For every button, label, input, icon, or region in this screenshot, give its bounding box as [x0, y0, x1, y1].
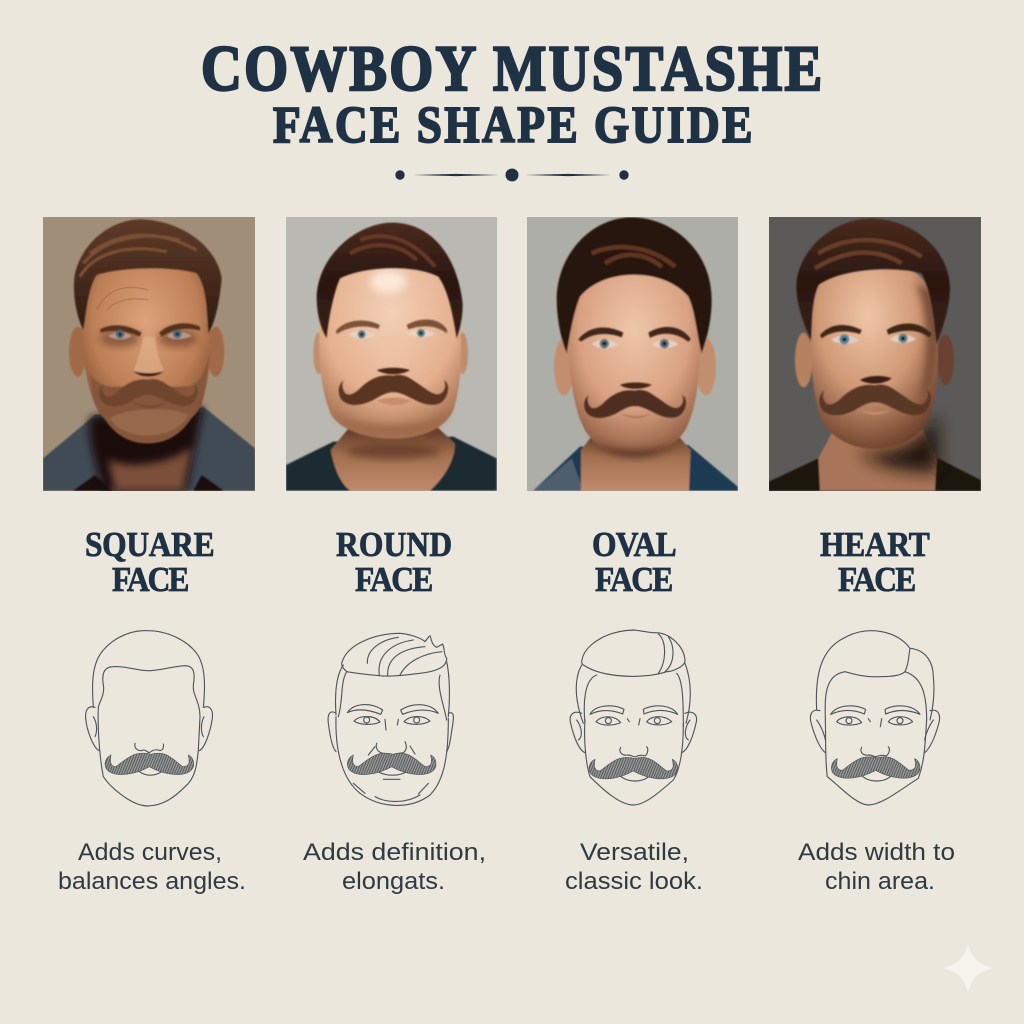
ornament divider [395, 168, 629, 182]
label: oval face [592, 526, 677, 599]
description: oval: classic look. [565, 868, 703, 895]
photo: oval face man [527, 217, 738, 491]
descriptions [58, 839, 955, 895]
label: round face: ROUND [336, 526, 452, 564]
photo: square face man [43, 217, 255, 491]
photo: heart face man [769, 217, 981, 491]
label: heart face: HEART [820, 526, 930, 564]
description: oval: Versatile, [580, 839, 689, 866]
icon: sparkle [943, 943, 993, 993]
label: oval face: OVAL [592, 526, 677, 564]
label: heart face [820, 526, 930, 599]
line drawing: round face [328, 633, 453, 805]
description: heart: chin area. [825, 868, 935, 895]
description: round: elongats. [342, 868, 445, 895]
label: oval face: FACE [595, 561, 673, 599]
label: square face [85, 526, 215, 599]
description: heart [798, 839, 955, 895]
title: COWBOY MUSTASHE [201, 33, 822, 105]
label: heart face: FACE [838, 561, 916, 599]
label: square face: FACE [112, 561, 189, 599]
description: round [303, 839, 486, 895]
line drawing: square face [86, 631, 213, 806]
description: heart: Adds width to [798, 839, 955, 866]
line drawing: oval face [570, 630, 697, 805]
description: round: Adds definition, [303, 839, 486, 866]
label: round face [336, 526, 452, 599]
description: square: Adds curves, [78, 839, 222, 866]
label: round face: FACE [355, 561, 433, 599]
description: square [58, 839, 246, 895]
title [201, 33, 822, 154]
label: square face: SQUARE [85, 526, 215, 564]
description: square: balances angles. [58, 868, 246, 895]
line drawing: heart face [810, 631, 940, 805]
face labels [85, 526, 930, 599]
title: FACE SHAPE GUIDE [273, 96, 752, 154]
photo: round face man [286, 217, 497, 491]
description: oval [565, 839, 703, 895]
